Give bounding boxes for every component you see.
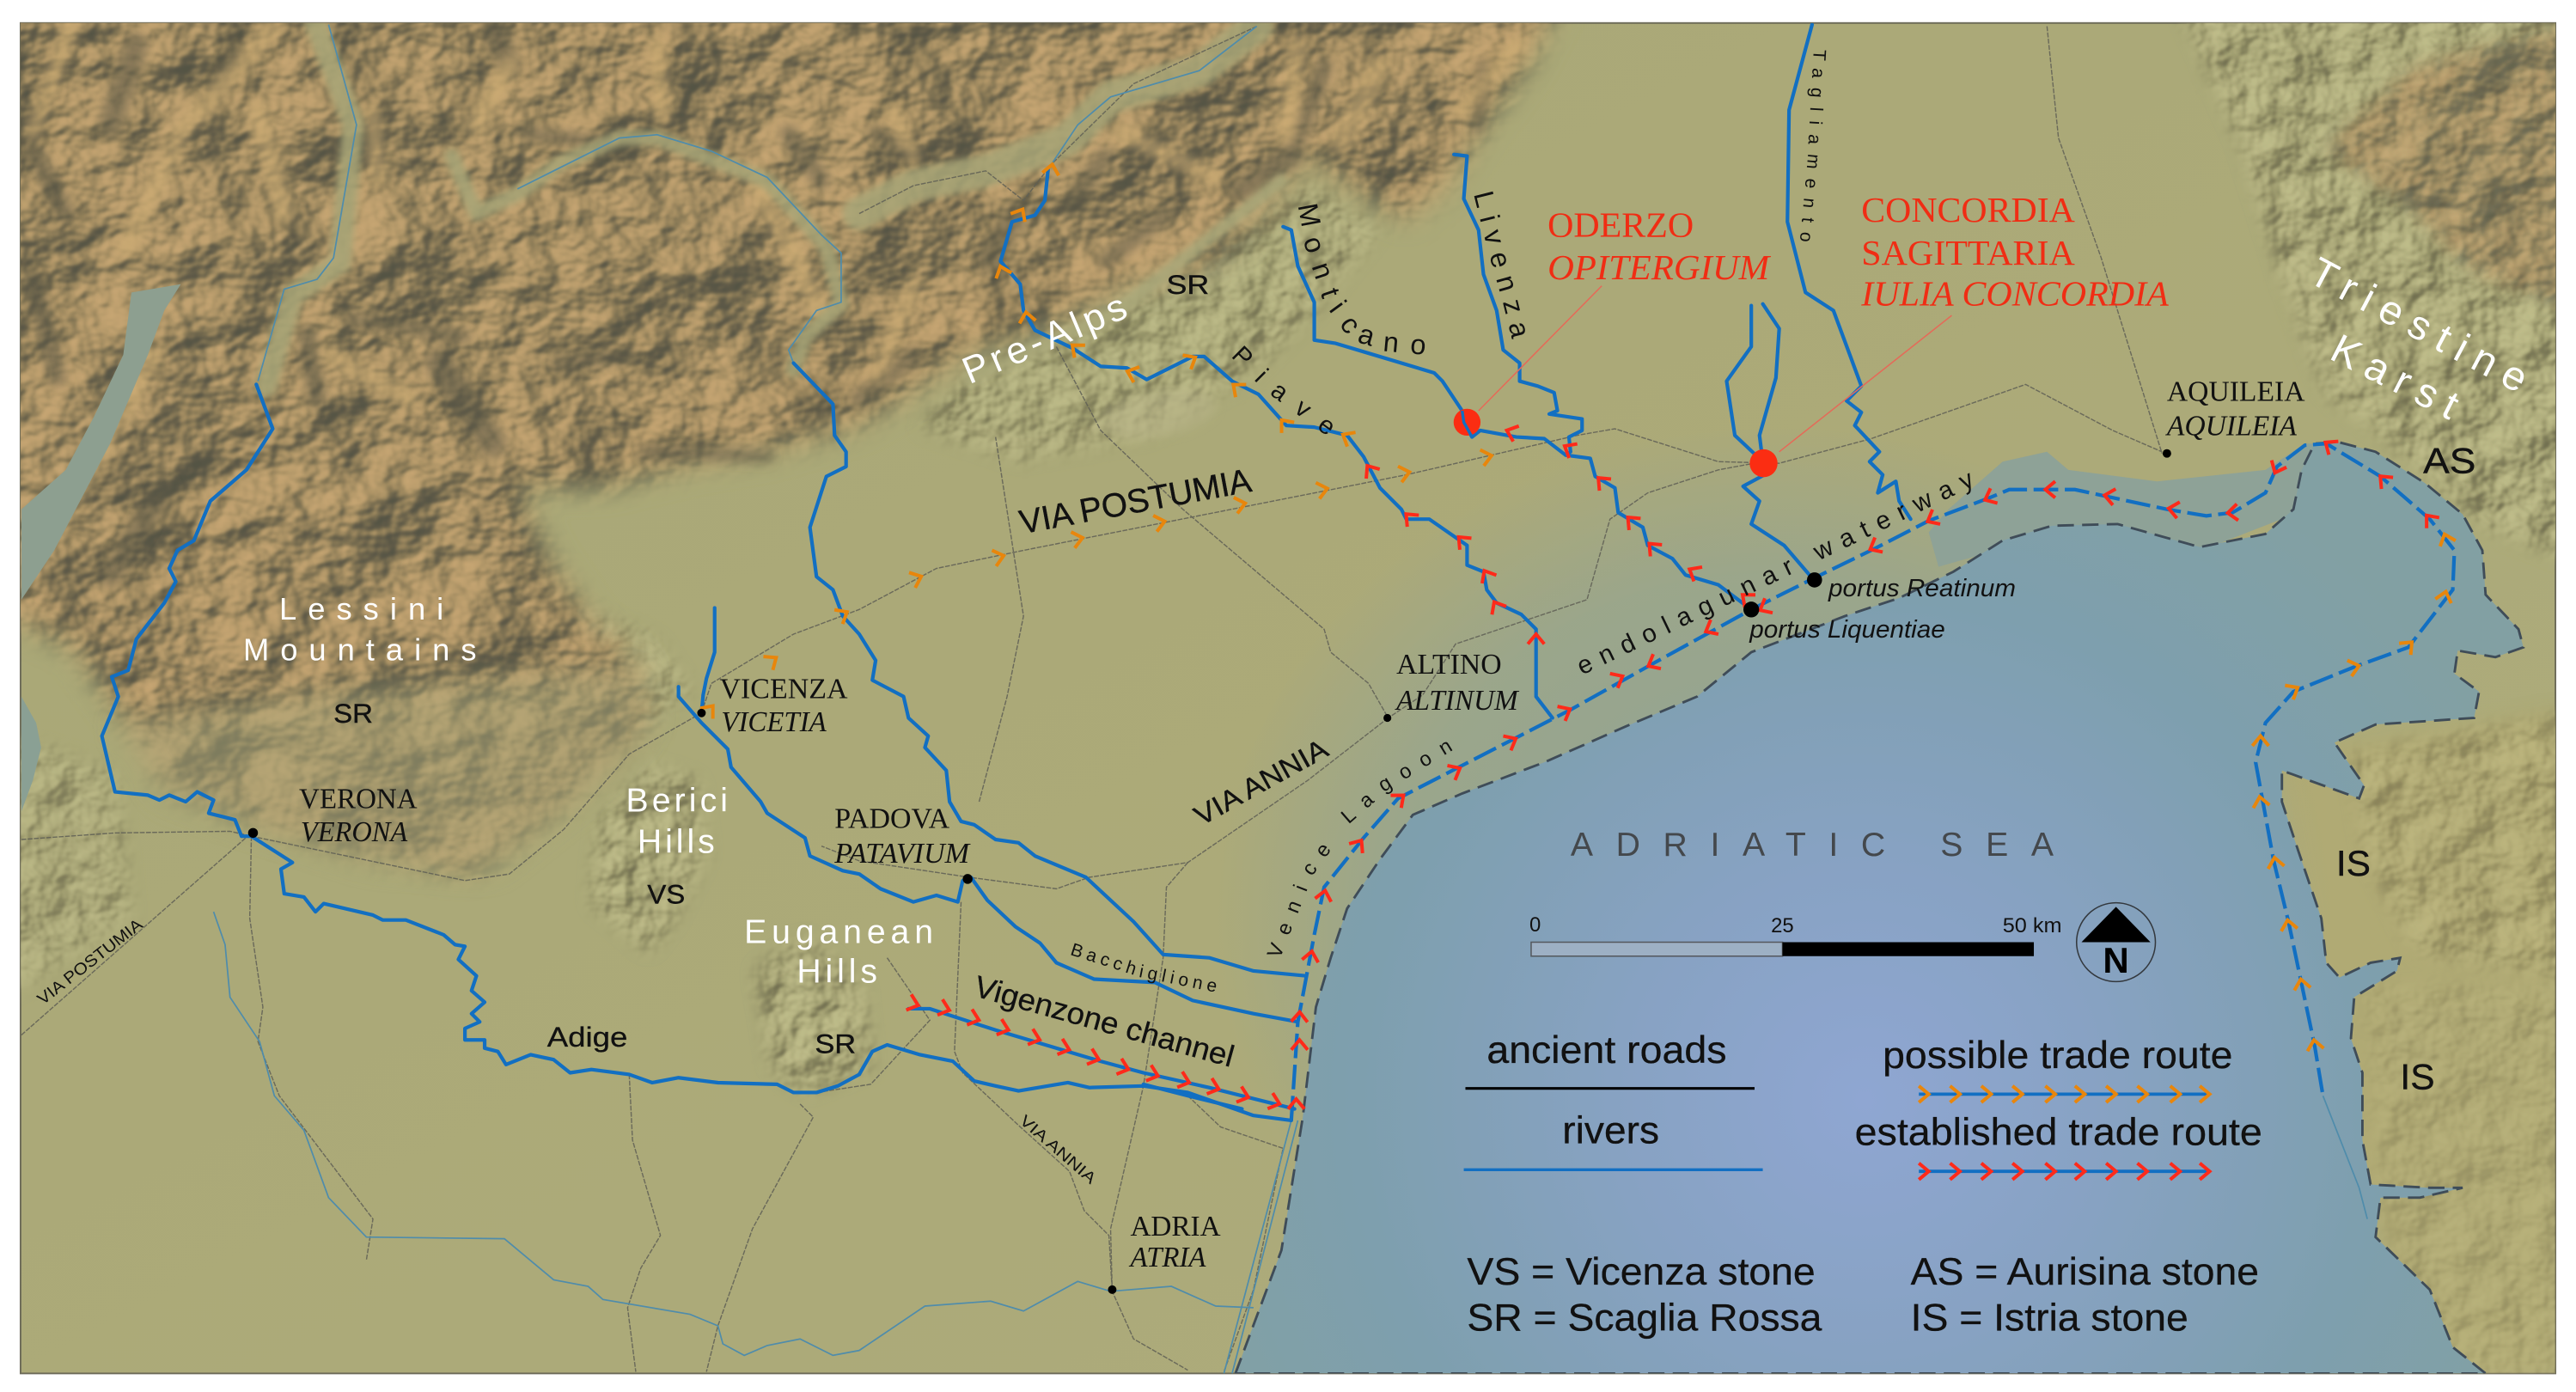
site marker: Oderzo: [1454, 409, 1480, 436]
label: Concordia Sagittaria: [1860, 190, 2170, 314]
label: Vicenza: [719, 674, 848, 738]
stone codes: AS: [2423, 441, 2475, 481]
label: Oderzo: [1547, 205, 1772, 287]
road: Verona to Vicenza: [252, 713, 701, 881]
river over Oderzo marker: [1462, 411, 1472, 437]
road: west to Verona: [21, 831, 252, 839]
label: Padova: PATAVIUM: [833, 838, 971, 870]
road: coast: [1187, 1096, 1283, 1371]
label: Euganean Hills: [744, 913, 933, 990]
legend: stone key: IS = Istria stone: [1911, 1296, 2188, 1340]
road: north to Aquileia: [2047, 27, 2162, 454]
river: Vigenzone lower branch: [1144, 1084, 1242, 1109]
label: Altino: [1395, 649, 1520, 717]
label: via Annia large: VIA ANNIA: [1189, 733, 1334, 832]
label: Berici Hills: [626, 783, 728, 860]
label: Adria: [1128, 1211, 1221, 1273]
label: Adria: ADRIA: [1130, 1211, 1221, 1242]
thin river: coast channel two: [1232, 1120, 1297, 1373]
legend: stone key: AS = Aurisina stone: [1911, 1249, 2259, 1293]
Istria tint: [2275, 706, 2563, 1380]
label: Padova: [833, 803, 971, 870]
label: Adria: ATRIA: [1128, 1242, 1206, 1273]
label: Livenza: Livenza: [1474, 191, 1525, 339]
label: Verona: VERONA: [299, 784, 418, 815]
river: upper Bacchiglione: [701, 607, 715, 713]
stone codes: SR: [1167, 269, 1209, 300]
rivers: [102, 25, 1911, 1120]
legend: stone key: VS = Vicenza stone: [1467, 1249, 1816, 1293]
town dots: [248, 449, 2171, 1294]
coastal haze on land: [1291, 494, 1975, 1036]
legend: established trade route: established trade route: [1855, 1110, 2262, 1154]
road: southern branch two: [706, 1104, 813, 1371]
label: Concordia Sagittaria: SAGITTARIA: [1861, 233, 2075, 272]
thin route: Istria end: [2323, 1096, 2367, 1219]
road: Padova to Adria: [955, 902, 1187, 1371]
thin river: coast channel: [1224, 1120, 1291, 1373]
label: Bacchiglione: Bacchiglione: [1068, 940, 1223, 998]
shaded ridges: [33, 27, 1484, 577]
label: Karst: Karst: [2323, 326, 2466, 429]
label: Concordia Sagittaria: IULIA CONCORDIA: [1860, 274, 2170, 314]
Montello hill: [1096, 381, 1220, 447]
road: via Annia south: [1111, 863, 1187, 1291]
road: Pre-Alps valley: [859, 27, 1257, 214]
label: Padova: PADOVA: [834, 803, 949, 835]
thin river: upper Brenta: [517, 135, 841, 363]
river: Monticano: [1283, 227, 1751, 609]
legend: [1464, 1028, 2262, 1340]
thin river: upper Piave: [1052, 27, 1257, 164]
leader line: Oderzo: [1479, 286, 1602, 411]
label: Concordia Sagittaria: CONCORDIA: [1861, 190, 2075, 229]
label: Lessini Mountains: Mountains: [243, 632, 476, 668]
scale bar: 0: [1529, 913, 1541, 937]
label: Aquileia: AQUILEIA: [2167, 376, 2305, 408]
leader line: Concordia: [1779, 315, 1951, 452]
thin river: upper Adige: [258, 25, 357, 382]
legend: stone key: [1467, 1249, 2259, 1340]
site marker: Concordia: [1749, 449, 1778, 477]
river: Vigenzone channel: [908, 1009, 1295, 1109]
established route arrows: [906, 423, 2439, 1112]
label: Vicenza: VICETIA: [721, 706, 827, 738]
river: Lemene west: [1726, 306, 1763, 461]
label: Oderzo: ODERZO: [1547, 205, 1694, 244]
label: Aquileia: AQUILEIA: [2165, 411, 2298, 443]
legend: established trade route: [1855, 1110, 2262, 1180]
lake Garda south shore: [21, 697, 41, 812]
stone codes: SR: [815, 1029, 856, 1059]
river: Adige: [102, 384, 1291, 1120]
label: Vicenza: VICENZA: [719, 674, 848, 705]
label: Piave: Piave: [1226, 341, 1353, 450]
thin river: Po plain: [214, 912, 1254, 1355]
river: Livenza: [1454, 155, 1582, 455]
legend: stone key: SR = Scaglia Rossa: [1467, 1296, 1822, 1340]
label: via Annia small: VIA ANNIA: [1016, 1112, 1100, 1187]
label: Vigenzone channel: Vigenzone channel: [971, 970, 1238, 1074]
label: Berici Hills: Hills: [638, 823, 715, 860]
label: Tagliamento: Tagliamento: [1795, 49, 1829, 253]
stone codes: [333, 269, 2475, 1097]
label: Euganean Hills: Euganean: [744, 913, 933, 950]
Adriatic sea: [1236, 442, 2524, 1373]
road: Pre-Alps to Altino: [1056, 346, 1389, 718]
road: via Postumia east: [701, 384, 2162, 713]
river: Bacchiglione: [679, 687, 1297, 1022]
label: Verona: [299, 784, 418, 848]
road: via Annia to Padova: [821, 718, 1389, 888]
label: endolagunar waterway: endolagunar waterway: [1572, 465, 1978, 681]
legend: rivers: rivers: [1562, 1108, 1659, 1152]
road: Padova north: [980, 437, 1023, 802]
label: Monticano: Monticano: [1298, 205, 1425, 354]
label: Euganean Hills: Hills: [797, 953, 877, 990]
road: Verona south: [250, 836, 373, 1260]
north arrow: [2077, 903, 2156, 981]
label: portus Liquentiae: portus Liquentiae: [1749, 616, 1945, 644]
label: Lessini Mountains: [243, 591, 476, 668]
label: via Postumia small: VIA POSTUMIA: [34, 916, 147, 1009]
label: Altino: ALTINUM: [1395, 685, 1520, 717]
label: Adriatic Sea: ADRIATIC SEA: [1571, 827, 2054, 864]
lit ridges: [33, 27, 1517, 532]
label: Berici Hills: Berici: [626, 783, 728, 820]
scale bar: [1529, 913, 2062, 956]
lake Garda: [21, 284, 180, 600]
scale bar: 50 km: [2003, 914, 2062, 937]
river: Piave: [1000, 169, 1553, 718]
alpine valleys: [266, 23, 1281, 386]
label: Venice Lagoon: Venice Lagoon: [1263, 728, 1467, 962]
Friuli lagoon: [1929, 443, 2349, 567]
mountain relief: Alps and Pre-Alps: [21, 22, 2555, 883]
road: southern branch one: [627, 1074, 661, 1371]
Lessini southern fade: [115, 665, 649, 870]
coastline dashed: [1236, 442, 2524, 1373]
label: Pre-Alps: Pre-Alps: [956, 285, 1133, 393]
river: Brenta: [794, 363, 1306, 976]
legend: ancient roads: ancient roads: [1486, 1028, 1726, 1071]
river: Lemene east: [1743, 304, 1814, 580]
river: Tagliamento: [1787, 25, 1911, 519]
stone codes: SR: [333, 698, 373, 729]
road: Euganean: [816, 958, 930, 1092]
road: via Postumia west: [21, 833, 252, 1035]
stone codes: IS: [2400, 1057, 2435, 1097]
label: portus Reatinum: portus Reatinum: [1828, 575, 2016, 602]
stone codes: IS: [2336, 843, 2371, 883]
scale bar: 25: [1771, 914, 1794, 937]
road: via Annia north: [1389, 461, 1763, 718]
label: Adige: Adige: [547, 1022, 627, 1053]
possible route arrows: [700, 163, 2456, 1051]
legend: possible trade route: possible trade route: [1883, 1033, 2232, 1077]
label: Altino: ALTINO: [1396, 649, 1502, 681]
label: Verona: VERONA: [301, 816, 408, 848]
north arrow: N: [2103, 940, 2129, 980]
trade route dashed: [1291, 443, 2454, 1120]
stone codes: VS: [647, 879, 685, 910]
label: Aquileia: [2165, 376, 2305, 443]
label: via Postumia large: VIA POSTUMIA: [1016, 462, 1255, 541]
label: Triestine: Triestine: [2302, 249, 2536, 402]
label: Oderzo: OPITERGIUM: [1547, 247, 1772, 287]
legend: possible trade route: [1883, 1033, 2232, 1102]
label: Lessini Mountains: Lessini: [279, 591, 443, 626]
